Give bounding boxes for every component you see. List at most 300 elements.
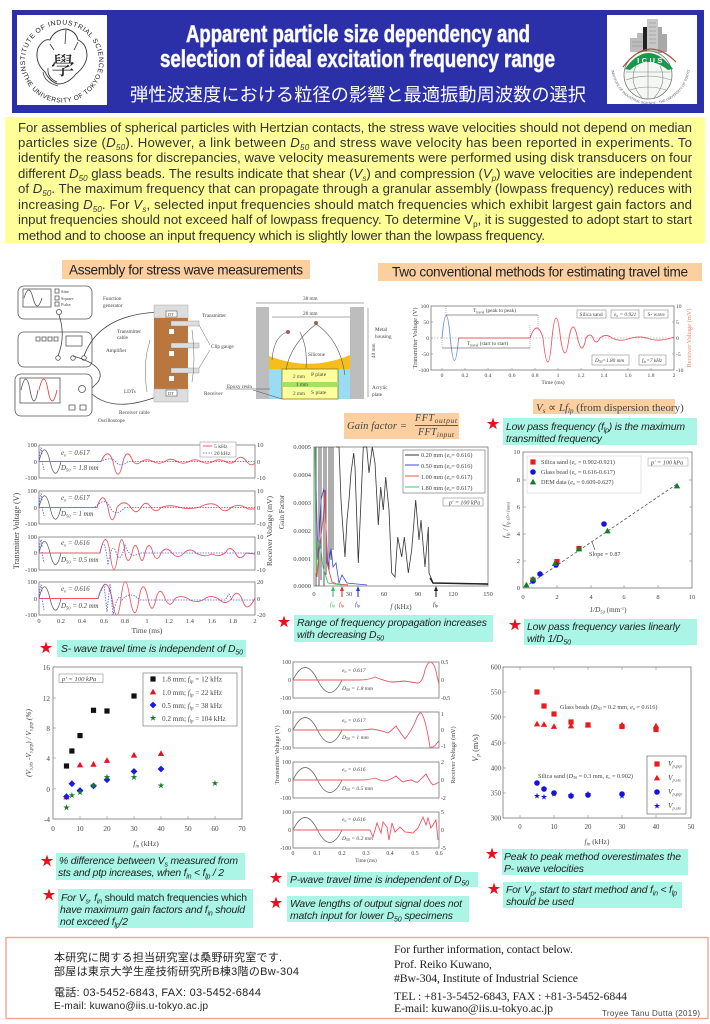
panel: 1 mm: 50 [346,737,350,741]
S-wave axes: 0 [34,596,37,603]
caption: Vp recommendation: lp [672,890,677,898]
abstract panel: ). However, a link between [125,135,290,150]
caption: low pass definition [487,418,697,445]
S-wave axes: 1.6 [208,618,216,625]
abstract panel: . For [102,197,133,212]
abstract panel: s [142,205,146,214]
panel: 0.2 mm: D [61,603,66,610]
abstract panel: . The maximum frequency that can propagate through a granular assembly (lowpass frequency) reduces with [51,181,692,196]
P-wave axes: 0.6 [435,851,443,857]
panel: 1.8 mm: D [342,686,346,692]
travel time chart: 50 [599,360,603,364]
panel: 1 mm: D [61,511,66,518]
legend: p,sts [672,778,681,784]
travel time chart: 1.4 [600,373,608,379]
travel time chart: in [643,360,646,364]
caption: Vs recommendation: s [85,898,89,906]
gain axes: 150 [483,591,493,598]
axes: 4 [517,531,521,538]
dispersion formula: (from dispersion theory) [573,402,684,414]
caption: Vs recommendation: , f [89,893,98,904]
caption: peak to peak [486,848,688,875]
panel: 1.8 mm: o [64,452,67,458]
travel time chart: -100 [419,368,429,374]
panel: 1 mm: D [342,735,346,741]
caption: Vs recommendation: lp [114,922,120,930]
annotations: = 0.3 mm, [577,773,606,780]
caption: percent difference: measured from [168,856,238,867]
caption: S-wave travel time: S- wave travel time is independent of D [61,644,236,655]
P-wave axes: 0.4 [386,851,394,857]
legend: p,ptp [672,792,683,798]
P-wave axes: 100 [282,660,291,666]
axes: 600 [491,664,502,672]
axes: -V [24,752,33,762]
P-wave axes: Receiver Voltage (mV) [450,726,457,784]
axes: 6 [517,504,521,511]
panel: 1 mm: = 1 mm [71,511,94,518]
abstract panel: of D [18,181,42,196]
axes: 0 [46,786,50,794]
S-wave axes: 0.8 [121,618,129,625]
caption: Vp recommendation: < f [658,885,673,896]
specimen column [145,305,210,402]
P-wave axes: 100 [282,810,291,816]
travel time chart: 0.8 [532,373,539,379]
japanese contact: 電話: 03-5452-6843, FAX: 03-5452-6844 [54,986,261,999]
legend: p,ptp [672,764,683,770]
series: 0.50 mm [315,447,367,585]
schematic labels: Transmitter [117,329,141,335]
S-wave axes: -100 [25,521,37,528]
P-wave axes: -2 [441,796,446,802]
caption: Vs recommendation: For V [61,893,86,904]
series: glass Vp ptp [534,689,659,732]
caption: percent difference: % difference between V [59,856,165,867]
panel: 0.2 mm: = 0.616 [346,817,366,823]
caption: peak to peak: P- wave velocities [504,864,584,875]
abstract panel: , selected input frequencies should match frequencies which exhibit largest gain factors and [146,197,692,212]
panel: 0.2 mm: = 0.2 mm [71,603,99,610]
legend: V [668,801,673,810]
abstract panel: ) and compression ( [366,166,484,181]
gain factor chart [278,444,493,611]
caption: percent difference [41,853,245,880]
panel: 1.8 mm: = 1.8 mm [71,465,99,472]
S-wave axes: 0 [37,618,41,625]
caption: frequency range: with decreasing D [297,630,377,641]
axes: 1/D [590,606,606,614]
cell cross-section: Acrylic [372,385,388,391]
legend: Glass bead (e [541,469,574,476]
lowpass arrows: f [330,601,332,608]
legend: V [668,759,673,768]
schematic labels: LDTs [124,389,136,395]
english contact [394,942,627,1015]
japanese contact: 部屋は東京大学生産技術研究所B棟3階のBw-304 [54,964,299,978]
axes: 2 [555,594,559,601]
travel time chart: S- wave [648,312,665,318]
axes: 50 [688,824,695,831]
panel: 0.5 mm: D [342,786,346,792]
panel: 0.5 mm: = 0.616 [346,767,366,773]
legend: 1.80 mm (e [421,485,449,492]
axes [502,449,696,614]
legend: 0.5 mm; f [162,702,190,710]
axes: (V [24,770,33,777]
legend: DEM data (e [541,479,573,486]
caption: frequency range: 50 [376,636,384,642]
travel time chart: (peak to peak) [484,307,516,314]
P-wave axes: Transmitter Voltage (V) [274,725,281,785]
annotations: e [630,704,635,711]
axes: 0 [518,824,522,831]
abstract panel: For assemblies of spherical particles with Hertzian contacts, the stress wave velocities should not depend on median [18,120,692,135]
panel: 1.8 mm: 50 [346,688,350,692]
credit: Troyee Tanu Dutta (2019) [602,1009,700,1018]
axes: 0 [517,585,521,592]
pressure tag [443,498,483,506]
travel time chart: 0.2 [462,373,469,379]
pressure tag: p′ = 100 kPa [448,500,480,506]
cell cross-section: Silicone [308,352,326,358]
dispersion formula: V [536,402,546,415]
legend: o [449,476,451,481]
travel time chart: (start to start) [478,340,509,347]
caption: S-wave travel time [40,640,246,657]
english contact: #Bw-304, Institute of Industrial Science [394,971,578,985]
legend [527,456,688,558]
axes [24,664,246,850]
caption: wavelengths: specimens [402,911,453,922]
S-wave axes: 0.2 [57,618,65,625]
dispersion formula: lp [568,407,574,415]
travel time chart: =1.80 mm [602,358,624,364]
panel: 1.8 mm: 20 kHz [214,451,231,457]
S-wave axes: 100 [27,534,37,541]
logo: Institute of Industrial Science: INSTITUTE OF INDUSTRIAL SCIENCE [20,20,104,74]
cell cross-section: housing [375,334,392,340]
travel time chart [412,304,693,386]
cell cross-section: 2 mm [293,391,305,397]
legend: Silica sand (e [541,459,574,466]
annotations: = 0.902) [610,773,633,780]
P-wave axes: -100 [280,696,291,702]
caption: linear variation: 50 [563,640,571,646]
legend: 0.50 mm (e [421,463,449,470]
panel: 0.5 mm: = 0.616 [66,540,90,547]
travel time chart: T [473,308,476,314]
legend [647,756,686,814]
gain axes: 0.0001 [293,556,311,563]
axes: 10 [513,449,521,456]
axes: 0 [51,825,55,833]
cell cross-section: 2 mm [293,374,305,380]
cell cross-section: 1 mm [296,382,308,388]
abstract panel: , it is suggested to adopt start to start [477,212,692,227]
legend: o [574,471,576,476]
S-wave axes: 0 [257,459,260,466]
english contact: Prof. Reiko Kuwano, [394,957,492,971]
axes: 12 [43,695,50,703]
caption: wavelengths [270,896,469,924]
P-wave axes: 0 [288,778,291,784]
cell cross-section: S plate [311,390,327,396]
caption: percent difference: s [164,862,168,868]
panel: 1 mm: 50 [66,514,71,518]
caption: Vs recommendation: in [207,910,213,918]
travel time chart: 0 [676,336,679,342]
S-wave axes: -10 [257,521,266,528]
S-wave axes: 0 [257,550,260,557]
axes: 2 [517,558,520,565]
amplifier: Amplifier [106,347,127,354]
travel time chart: -50 [422,352,429,358]
schematic labels: Receiver cable [119,410,150,416]
heading: two methods: Two conventional methods for estimating travel time [392,264,688,280]
english contact: E-mail: kuwano@iis.u-tokyo.ac.jp [394,1001,553,1015]
abstract panel: s [362,174,366,183]
P-wave axes: 100 [282,710,291,716]
caption: Vs recommendation: not exceed f [60,917,115,928]
annotations: 50 [573,775,577,780]
gain factor formula: FFT [418,427,437,438]
series: silica sand [530,546,582,583]
travel time chart: e [614,312,616,318]
gain axes: 0.0000 [293,583,311,590]
axes: V [471,757,480,762]
function generator: generator [103,303,123,309]
travel time chart: 1.2 [578,373,585,379]
axes: 20 [103,825,111,833]
axes: 50 [184,825,192,833]
panel: 0.5 mm [39,537,255,570]
oscilloscope: Oscilloscope [98,418,125,424]
caption: P-wave travel time [270,872,478,888]
axes: 40 [157,825,165,833]
caption: wavelengths: 50 [394,916,402,924]
schematic labels [117,313,234,416]
series: silica Vp sts [534,791,625,800]
panel: 1.8 mm: 5 kHz [214,444,228,450]
axes: 30 [619,824,626,831]
legend: o [449,454,451,459]
P-wave axes: -0.5 [441,696,450,702]
S-wave axes: Time (ms) [132,626,163,635]
cell cross-section: 40 mm [371,343,377,358]
axes: 30 [130,825,138,833]
gain factor formula: input [437,430,455,439]
function generator: Pulse [61,302,71,307]
japanese contact [54,950,299,1012]
caption: Vp recommendation [488,882,682,908]
panel: 0.5 mm: = 0.5 mm [350,786,373,792]
footer contact panel [6,938,708,1018]
gain axes: 120 [448,591,458,598]
axes: 70 [238,825,246,833]
S-wave axes: -10 [257,475,266,482]
legend: = 0.616) [451,452,472,459]
P-wave axes: 0.5 [411,851,419,857]
lowpass vs 1/D50 chart [502,449,696,614]
annotations [538,704,657,780]
legend: lp [190,680,194,685]
S-wave axes: 10 [257,534,263,541]
panel: 1 mm: o [64,498,67,502]
schematic labels: Transmitter [202,313,226,319]
legend: 1.0 mm; f [162,689,190,697]
annotations: Glass beads (D [560,704,597,711]
abstract panel: and stress wave velocity has been reported in experiments. To [309,135,692,150]
panel: 0.5 mm: D [61,557,66,564]
japanese contact: 本研究に関する担当研究室は桑野研究室です. [54,950,282,964]
cell cross-section: 38 mm [303,296,318,302]
logo: Institute of Industrial Science: · THE UNIVERSITY OF TOKYO · [24,70,100,102]
panel: 0.2 mm [293,812,439,848]
travel time chart: 0.6 [508,373,516,379]
panel: 1 mm: e [342,718,344,724]
travel time chart: travel [476,310,484,314]
S-wave axes: 10 [257,442,263,449]
caption: wavelengths: Wave lengths of output signal does not [290,899,463,910]
P-wave axes: 0 [441,828,444,834]
travel time chart: 2 [673,373,676,379]
S-wave axes: 0 [257,505,260,512]
panel: 0.5 mm: e [61,540,64,547]
annotations: 50 [597,706,601,711]
axes: lp (D=1mm) [506,501,510,525]
axes: 10 [689,594,696,601]
S-wave axes: 0.6 [100,618,108,625]
legend: = 0.902-0.921) [576,459,615,466]
caption: linear variation [509,618,697,646]
panel: 0.2 mm: o [344,819,346,823]
title: Apparent particle size dependency and [186,21,530,48]
schematic labels: Receiver [204,391,223,397]
gain axes: 0 [312,591,316,598]
axes: 8 [46,725,50,733]
abstract panel: 50 [93,205,102,214]
axes: 500 [491,714,502,722]
P-wave axes: -100 [280,746,291,752]
panel: 1.8 mm: = 0.617 [66,450,90,457]
gain axes: 90 [415,591,421,598]
caption: P-wave travel time: P-wave travel time is independent of D [290,875,462,886]
pressure tag: p′ = 100 kPa [61,676,97,683]
caption: P-wave travel time: 50 [461,880,469,888]
series: glass Vp sts [534,721,659,729]
panel: 0.2 mm: 50 [66,606,71,610]
caption: percent difference: lp [205,874,211,880]
function generator: Sine [61,289,69,294]
legend: 1.00 mm (e [421,474,449,481]
abstract panel: p [491,174,497,183]
annotations: = 0.616) [635,704,657,711]
cell cross-section: P plate [311,372,327,378]
schematic labels: cable [117,335,129,341]
P-wave axes: 5 [441,810,444,816]
S-wave axes: -100 [25,612,37,619]
annotations: o [633,706,635,711]
legend: V [668,787,673,796]
caption: low pass definition: Low pass frequency (f [506,422,604,433]
panel: 1.8 mm: = 0.617 [346,668,366,674]
test setup schematic [15,286,392,424]
P-wave axes: 0 [288,828,291,834]
travel time chart: 1.6 [624,373,632,379]
travel time chart: 50 [423,320,429,326]
legend [403,450,485,493]
series: 1.00 mm [315,447,348,585]
legend: = 0.616-0.617) [576,469,615,476]
dispersion formula [533,399,684,415]
caption: Vp recommendation: in [653,890,658,898]
S-wave axes: 1.2 [165,618,173,625]
abstract panel: D [290,135,310,152]
abstract panel: V [354,166,366,183]
axes: (mm [605,606,621,614]
panel: 1.8 mm [293,662,439,698]
panel: 1 mm: e [61,495,64,502]
gain axes: Gain Factor [278,494,286,529]
travel time chart: travel [470,344,478,348]
gain factor formula: output [435,416,458,425]
S-wave axes: -10 [257,567,266,574]
function generator: Square [61,296,74,301]
gain axes: 0.0002 [293,528,311,535]
P-wave axes: 0.2 [338,851,346,857]
panel: 0.2 mm [39,582,255,615]
caption: S-wave travel time: 50 [235,650,243,656]
axes: 10 [551,824,558,831]
abstract panel: 50 [300,143,310,152]
lowpass arrows: f [433,601,435,608]
caption: percent difference: < f [191,868,207,879]
P-wave axes: 2 [441,760,444,766]
P-wave axes: -100 [280,796,291,802]
S-wave axes: 100 [27,488,37,495]
legend: = 0.609-0.627) [575,479,614,486]
travel time chart: -5 [676,352,681,358]
panel: 0.2 mm: = 0.616 [66,586,90,593]
P-wave axes: 0 [441,778,444,784]
S-wave axes: 1 [145,618,149,625]
legend: p′ = 100 kPa [650,460,683,466]
amplifier [18,332,127,367]
gain axes: f (kHz) [390,602,412,611]
series: 1.8 mm [64,693,137,769]
gain axes: 60 [381,591,387,598]
travel time chart: =7 kHz [646,358,662,364]
axes: 6 [622,594,626,601]
abstract panel: 50 [79,174,88,183]
caption: percent difference: / 2 [210,868,224,879]
caption: Vs recommendation: should [213,905,246,916]
axes: 16 [43,664,50,672]
series: silica Vp ptp [534,780,625,799]
caption: linear variation: with 1/D [527,634,563,645]
Vp chart [471,664,695,848]
abstract panel: ) wave velocities are independent [496,166,692,181]
axes: 8 [656,594,660,601]
title [160,21,555,73]
lowpass arrows: lp [341,603,345,608]
travel time chart: f [642,358,643,364]
annotations: e [606,773,610,780]
abstract panel: V [483,166,497,183]
axes: -1 [620,606,625,611]
gain axes [278,444,493,611]
